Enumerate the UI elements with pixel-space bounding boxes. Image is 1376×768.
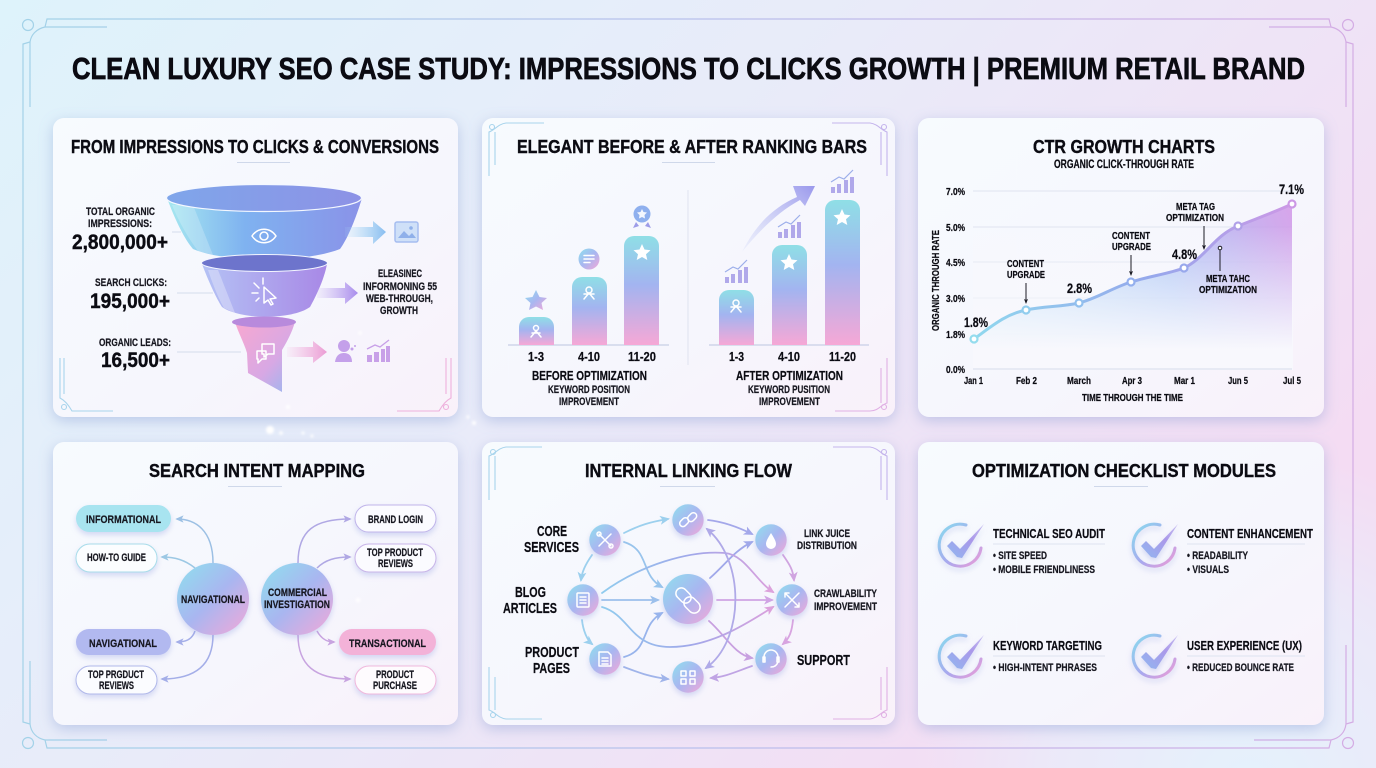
stage labels: SEARCH CLICKS:: [95, 277, 167, 289]
x axis labels: Jun 5: [1228, 375, 1248, 387]
module: user experience: [1133, 635, 1305, 677]
node labels: PAGES: [533, 660, 570, 677]
module: content enhancement: CONTENT ENHANCEMENT: [1187, 527, 1313, 541]
x axis labels: Jan 1: [964, 375, 983, 387]
node labels: SUPPORT: [797, 652, 850, 669]
hub: navigational: [177, 563, 249, 635]
pill: how-to guide: HOW-TO GUIDE: [87, 552, 146, 564]
x axis labels: Feb 2: [1016, 375, 1037, 387]
funnel stage: impressions: [166, 184, 362, 260]
funnel stage: leads: [232, 316, 296, 392]
panel: ranking bars: [482, 118, 895, 417]
node labels: CORE: [537, 523, 567, 540]
callout: growth text: [363, 268, 437, 317]
corner ornaments: ranking panel: [489, 123, 887, 411]
node labels: LINK JUICE: [804, 528, 850, 540]
callout: growth text: WEB-THROUGH,: [366, 293, 433, 305]
hub: commercial investigation: [261, 563, 333, 635]
pill: brand login: [355, 505, 436, 532]
funnel stage: clicks: [202, 254, 328, 317]
pill: brand login: BRAND LOGIN: [368, 514, 423, 526]
arrow: impressions output: [345, 221, 386, 244]
subtitle: ORGANIC CLICK-THROUGH RATE: [1054, 159, 1194, 171]
y axis labels: 1.8%: [946, 329, 966, 341]
pill: top product reviews left: REVIEWS: [99, 680, 134, 692]
chart: before optimization: BEFORE OPTIMIZATION: [532, 368, 647, 383]
stage labels: TOTAL ORGANIC: [86, 206, 155, 218]
x axis labels: Apr 3: [1122, 375, 1142, 387]
module: technical seo audit: [939, 524, 1105, 576]
icon: person: [335, 340, 356, 362]
corner ornaments: funnel panel: [60, 358, 451, 411]
panel: internal linking flow: [482, 442, 895, 725]
node labels: BLOG: [515, 584, 546, 601]
node labels: ARTICLES: [503, 600, 557, 617]
heading: INTERNAL LINKING FLOW: [585, 461, 792, 481]
callout: growth text: INFORMONING 55: [363, 281, 437, 293]
node: blog articles: [567, 584, 599, 616]
chart: before optimization: KEYWORD POSITION: [548, 384, 630, 396]
annotations: OPTIMIZATION: [1199, 284, 1257, 296]
value labels: 1.8%: [964, 314, 988, 330]
funnel: [166, 184, 362, 392]
icon: growth bars: [367, 340, 390, 362]
chart: before optimization: [508, 206, 669, 408]
node labels: DISTRIBUTION: [797, 540, 857, 552]
pill: transactional: [339, 629, 436, 655]
value labels: 4.8%: [1172, 246, 1197, 262]
node labels: [503, 523, 877, 677]
pill: how-to guide: [76, 544, 157, 572]
sparkles: [266, 332, 476, 602]
y axis labels: ORGANIC THROUGH RATE: [930, 230, 942, 331]
heading: OPTIMIZATION CHECKLIST MODULES: [972, 461, 1276, 481]
line chart: [930, 181, 1304, 404]
chart: before optimization: IMPROVEMENT: [559, 396, 619, 408]
x axis labels: Mar 1: [1174, 375, 1195, 387]
x axis labels: [964, 375, 1301, 404]
value labels: [964, 181, 1304, 330]
pill: product purchase: PURCHASE: [373, 680, 417, 692]
pill: navigational: [76, 629, 171, 655]
pill: top product reviews right: REVIEWS: [378, 558, 413, 570]
pill: top product reviews right: TOP PRODUCT: [367, 547, 423, 559]
module: technical seo audit: • SITE SPEED: [993, 550, 1047, 562]
node: link juice: [755, 524, 787, 556]
chart: after optimization: 11-20: [829, 349, 856, 364]
y axis labels: 0.0%: [946, 364, 966, 376]
annotations: UPGRADE: [1112, 241, 1151, 253]
node: top link: [672, 504, 704, 536]
node labels: SERVICES: [524, 539, 579, 556]
panel: search intent mapping: [53, 442, 458, 725]
annotations: META TAHC: [1206, 273, 1250, 285]
pill: product purchase: PRODUCT: [376, 669, 414, 681]
module: technical seo audit: TECHNICAL SEO AUDIT: [993, 527, 1105, 541]
callout: growth text: ELEASINEC: [378, 268, 422, 280]
heading: SEARCH INTENT MAPPING: [149, 461, 365, 481]
arrow: clicks output: [317, 282, 358, 304]
corner ornaments: linking panel: [489, 447, 887, 719]
pill: informational: INFORMATIONAL: [86, 514, 161, 526]
annotations: CONTENT: [1112, 230, 1150, 242]
node: support: [755, 643, 787, 675]
module: content enhancement: [1133, 524, 1313, 576]
node: central hub: [663, 574, 713, 624]
module: content enhancement: • VISUALS: [1187, 564, 1229, 576]
flow arrows: [581, 519, 794, 679]
node: crawlability: [776, 584, 808, 616]
icon: image: [395, 222, 418, 242]
hub: commercial investigation: INVESTIGATION: [264, 599, 330, 611]
y axis labels: [930, 186, 966, 376]
stage labels: [72, 206, 241, 372]
node: bottom grid: [672, 661, 704, 693]
heading: ELEGANT BEFORE & AFTER RANKING BARS: [517, 137, 867, 157]
node labels: CRAWLABILITY: [814, 588, 877, 600]
chart: after optimization: AFTER OPTIMIZATION: [736, 368, 843, 383]
node: product pages: [589, 643, 621, 675]
module: keyword targeting: KEYWORD TARGETING: [993, 639, 1102, 653]
chart: after optimization: [709, 170, 869, 408]
stage labels: 16,500+: [101, 349, 170, 372]
stage labels: 2,800,000+: [72, 231, 168, 254]
hub: commercial investigation: COMMERCIAL: [268, 587, 327, 599]
arrow: leads output: [287, 341, 327, 363]
annotations: CONTENT: [1007, 258, 1044, 270]
node labels: IMPROVEMENT: [814, 601, 877, 613]
annotations: META TAG: [1176, 201, 1215, 213]
module: user experience: • REDUCED BOUNCE RATE: [1187, 662, 1294, 674]
chart: before optimization: 1-3: [528, 349, 544, 364]
y axis labels: 7.0%: [946, 186, 966, 198]
module: content enhancement: • READABILITY: [1187, 550, 1248, 562]
stage labels: 195,000+: [90, 290, 170, 313]
node labels: PRODUCT: [525, 644, 579, 661]
annotations: OPTIMIZATION: [1166, 212, 1224, 224]
hub: navigational: NAVIGATIONAL: [181, 594, 245, 606]
heading: FROM IMPRESSIONS TO CLICKS & CONVERSIONS: [71, 137, 439, 157]
chart: after optimization: KEYWORD PUSITION: [748, 384, 830, 396]
chart: after optimization: IMPROVEMENT: [759, 396, 820, 408]
y axis labels: 3.0%: [946, 293, 966, 305]
module: technical seo audit: • MOBILE FRIENDLINESS: [993, 564, 1095, 576]
chart: before optimization: 4-10: [578, 349, 600, 364]
node: core services: [589, 524, 621, 556]
module: keyword targeting: • HIGH-INTENT PHRASES: [993, 662, 1097, 674]
pill: product purchase: [355, 666, 436, 694]
stage labels: IMPRESSIONS:: [88, 218, 152, 230]
x axis labels: March: [1067, 375, 1091, 387]
y axis labels: 5.0%: [946, 222, 966, 234]
annotations: [1007, 201, 1257, 303]
module: user experience: USER EXPERIENCE (UX): [1187, 639, 1302, 653]
x axis labels: Jul 5: [1283, 375, 1301, 387]
pill: navigational: NAVIGATIONAL: [89, 638, 157, 650]
chart: after optimization: 1-3: [729, 349, 744, 364]
chart: after optimization: 4-10: [778, 349, 800, 364]
pill: top product reviews right: [355, 544, 436, 572]
pill: top product reviews left: [76, 666, 157, 694]
heading: CTR GROWTH CHARTS: [1033, 137, 1215, 157]
connector arrows: [162, 519, 350, 679]
stage labels: ORGANIC LEADS:: [99, 337, 171, 349]
annotations: UPGRADE: [1007, 269, 1045, 281]
callout: growth text: GROWTH: [380, 305, 418, 317]
value labels: 2.8%: [1067, 280, 1092, 296]
pill: top product reviews left: TOP PRGDUCT: [88, 669, 144, 681]
nodes: [567, 504, 808, 693]
pill: informational: [76, 505, 171, 532]
chart: before optimization: 11-20: [628, 349, 656, 364]
panel: from impressions to clicks: [53, 118, 458, 417]
x axis labels: TIME THROUGH THE TIME: [1082, 392, 1183, 404]
y axis labels: 4.5%: [946, 257, 966, 269]
pill: transactional: TRANSACTIONAL: [349, 638, 426, 650]
panel: optimization checklist: [918, 442, 1324, 725]
panel: CTR growth: [918, 118, 1324, 417]
value labels: 7.1%: [1279, 181, 1304, 197]
module: keyword targeting: [939, 635, 1105, 677]
